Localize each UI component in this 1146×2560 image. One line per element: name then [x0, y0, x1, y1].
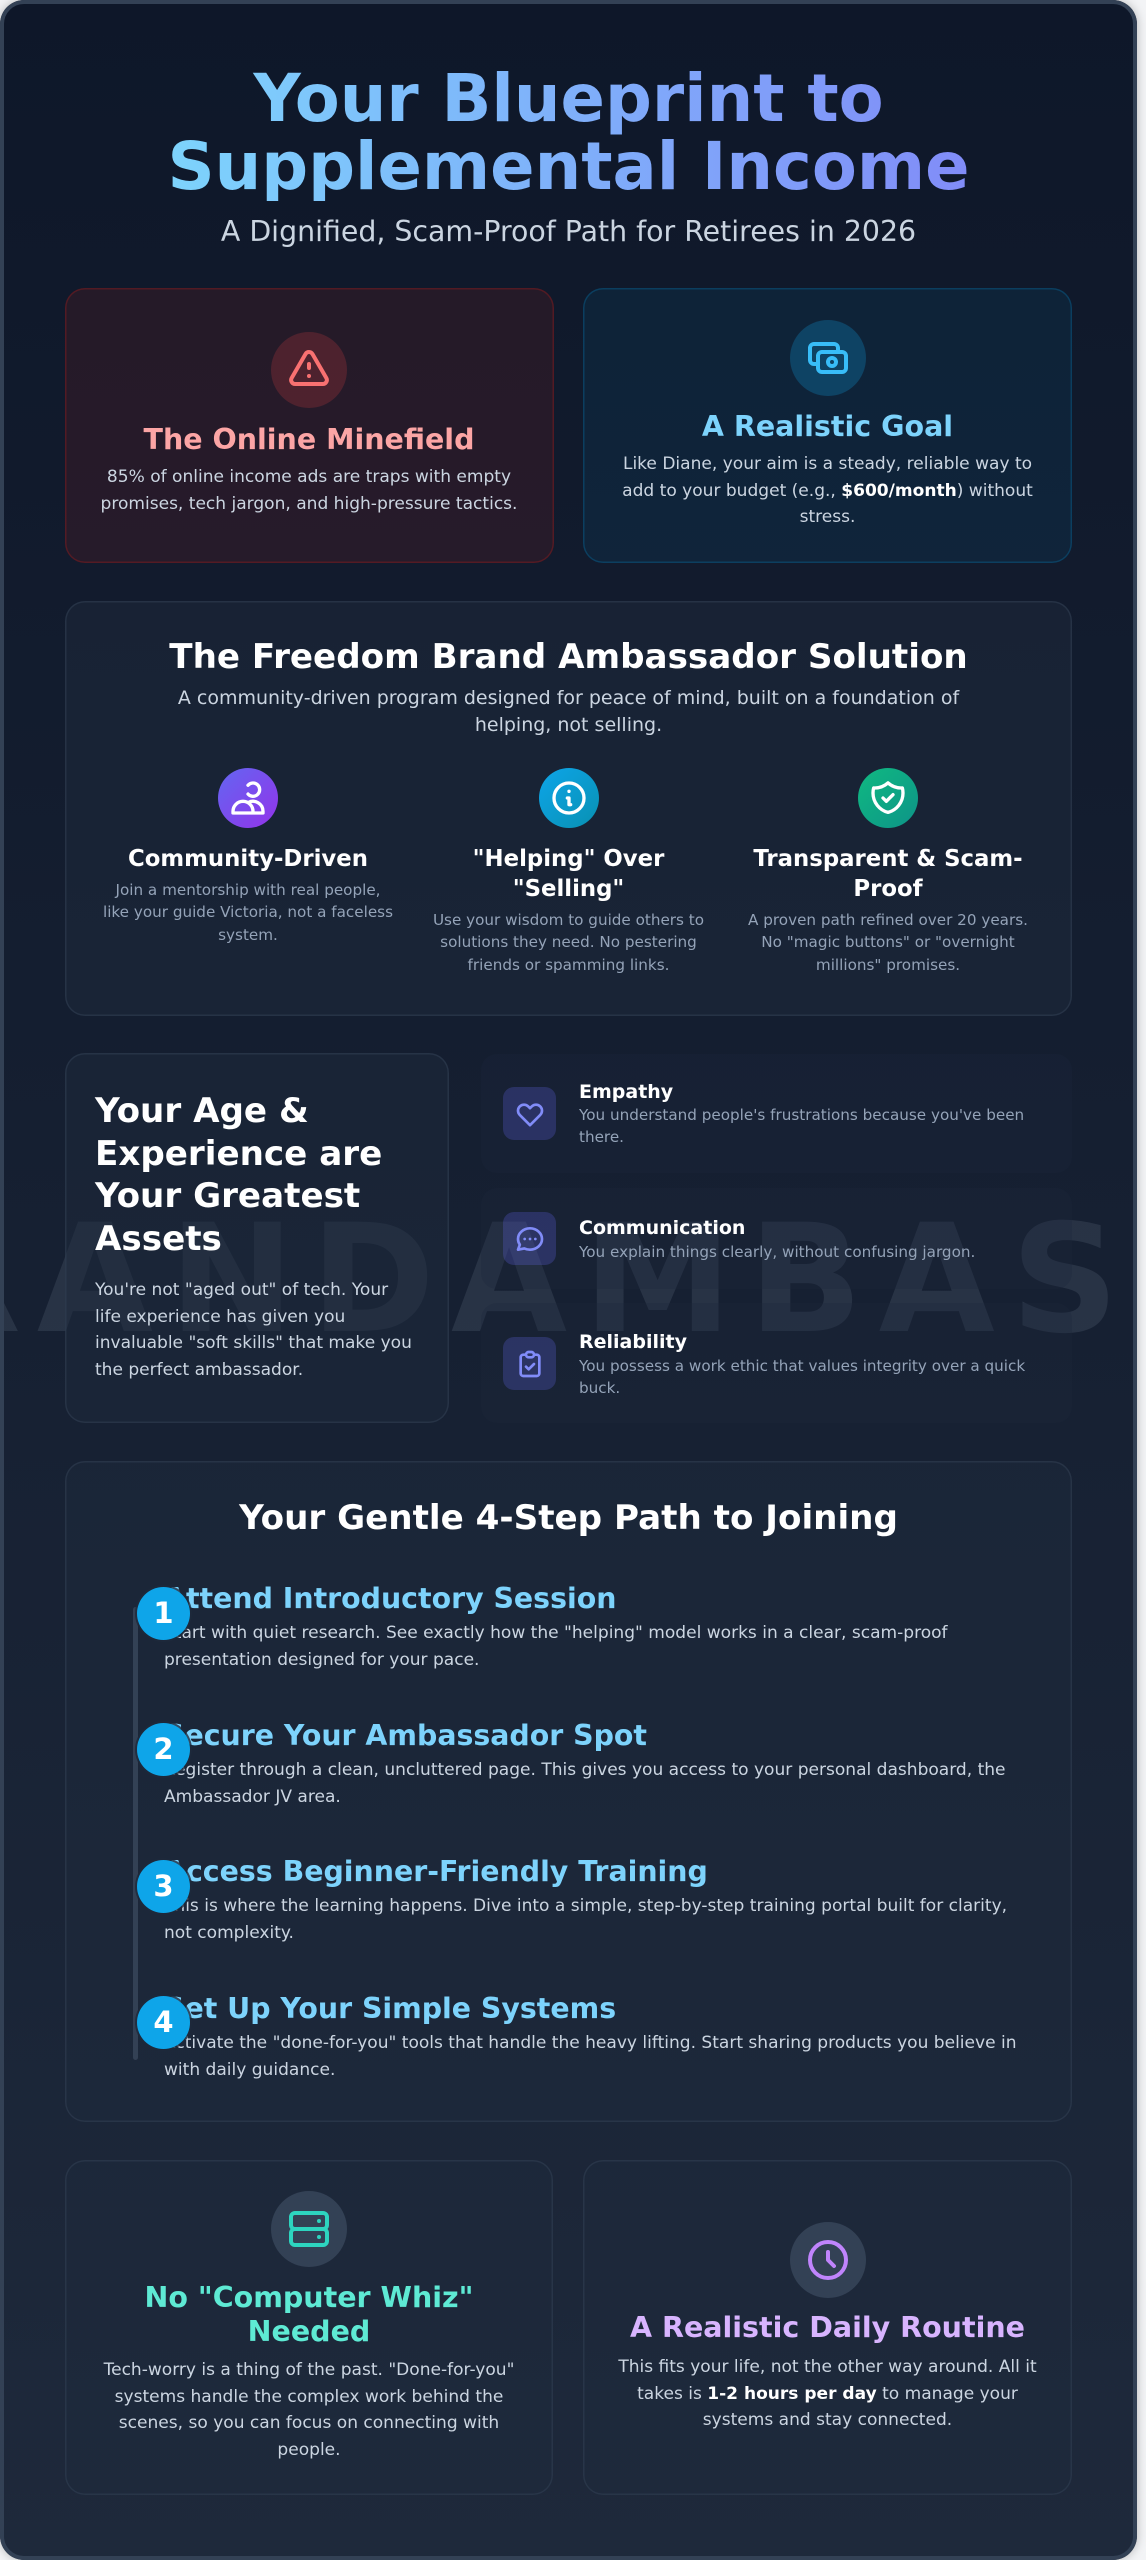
- feature text: [103, 880, 393, 944]
- panel: 4-step path: [65, 1461, 1072, 2122]
- feature title: Proof: [853, 876, 923, 902]
- title: Your Blueprint to: [253, 61, 884, 137]
- icon: heart: [503, 1087, 556, 1140]
- step number: 3: [153, 1869, 174, 1903]
- step number: [137, 1860, 190, 1913]
- feature title: [473, 846, 664, 902]
- text block: [622, 454, 1033, 527]
- heading: Your Age &: [95, 1091, 309, 1131]
- heading: Experience are: [95, 1134, 382, 1174]
- card title: Communication: [579, 1216, 745, 1238]
- panel: a realistic goal: [583, 288, 1072, 563]
- feature text: No "magic buttons" or "overnight: [761, 933, 1015, 951]
- step text: This is where the learning happens. Dive into a simple, step-by-step training portal built for clarity,: [164, 1896, 1007, 1916]
- step text: Ambassador JV area.: [164, 1787, 341, 1807]
- text block: 85% of online income ads are traps with empty: [107, 467, 511, 487]
- card text: there.: [579, 1128, 624, 1146]
- text block: You're not "aged out" of tech. Your: [95, 1280, 388, 1300]
- title: Supplemental Income: [167, 129, 970, 205]
- step 3: [135, 1855, 1007, 1943]
- feature text: system.: [218, 926, 278, 944]
- step title: Access Beginner-Friendly Training: [164, 1855, 708, 1888]
- card text: You explain things clearly, without confusing jargon.: [579, 1242, 975, 1260]
- feature text: friends or spamming links.: [468, 956, 669, 974]
- card: communication: [481, 1188, 1072, 1289]
- step number: 1: [153, 1596, 174, 1630]
- icon: chat bubble: [503, 1212, 556, 1265]
- text block: stress.: [800, 507, 855, 527]
- text block: promises, tech jargon, and high-pressure tactics.: [101, 494, 517, 514]
- feature text: [748, 910, 1028, 974]
- heading: [94, 1091, 382, 1259]
- text block: [101, 467, 517, 514]
- timeline line: [133, 1607, 138, 2060]
- step text: [164, 1760, 1006, 1807]
- heading: Needed: [248, 2315, 370, 2348]
- feature title: "Selling": [513, 876, 624, 902]
- step 4: [135, 1992, 1017, 2080]
- feature title: Transparent & Scam-: [753, 846, 1023, 872]
- text block: invaluable "soft skills" that make you: [95, 1333, 412, 1353]
- card title: Reliability: [579, 1330, 687, 1352]
- text block: This fits your life, not the other way around. All it: [618, 2357, 1037, 2377]
- text block: people.: [277, 2440, 341, 2460]
- step title: Attend Introductory Session: [164, 1582, 616, 1615]
- text block: life experience has given you: [95, 1307, 345, 1327]
- text block: Like Diane, your aim is a steady, reliable way to: [623, 454, 1032, 474]
- feature text: [433, 910, 704, 974]
- step text: presentation designed for your pace.: [164, 1650, 479, 1670]
- text block: A community-driven program designed for peace of mind, built on a foundation of: [178, 687, 959, 709]
- panel: a realistic daily routine: [583, 2160, 1072, 2495]
- step text: not complexity.: [164, 1923, 294, 1943]
- feature text: like your guide Victoria, not a faceless: [103, 903, 393, 921]
- feature title: "Helping" Over: [473, 846, 664, 872]
- heading: A Realistic Goal: [702, 410, 953, 443]
- text block: scenes, so you can focus on connecting with: [119, 2413, 499, 2433]
- icon: cash: [790, 320, 866, 396]
- step text: with daily guidance.: [164, 2060, 335, 2080]
- step 2: [135, 1719, 1006, 1807]
- text block: [618, 2357, 1037, 2430]
- feature text: A proven path refined over 20 years.: [748, 910, 1028, 928]
- icon: community: [218, 768, 278, 828]
- heading: The Online Minefield: [144, 423, 474, 456]
- heading: Your Greatest: [95, 1176, 360, 1216]
- step number: [137, 1996, 190, 2049]
- text block: helping, not selling.: [475, 714, 662, 736]
- step 1: [135, 1582, 948, 1670]
- step text: Register through a clean, uncluttered page. This gives you access to your personal dashboard, the: [164, 1760, 1006, 1780]
- feature: transparent and scam-proof: [748, 768, 1028, 974]
- text block: takes is 1-2 hours per day to manage your: [637, 2384, 1018, 2404]
- heading: No "Computer Whiz": [145, 2281, 473, 2314]
- icon: clipboard check: [503, 1337, 556, 1390]
- panel: the online minefield: [65, 288, 554, 563]
- icon: warning triangle: [271, 332, 347, 408]
- step text: [164, 1623, 948, 1670]
- feature text: Use your wisdom to guide others to: [433, 910, 704, 928]
- text block: the perfect ambassador.: [95, 1360, 303, 1380]
- panel: solution: [65, 601, 1072, 1016]
- feature title: [753, 846, 1023, 902]
- text block: [95, 1280, 412, 1380]
- panel: no computer whiz needed: [65, 2160, 553, 2495]
- feature text: Join a mentorship with real people,: [115, 880, 381, 898]
- feature: helping over selling: [433, 768, 704, 974]
- card text: You possess a work ethic that values integrity over a quick: [579, 1356, 1025, 1374]
- heading: The Freedom Brand Ambassador Solution: [169, 637, 968, 677]
- icon: shield: [858, 768, 918, 828]
- feature text: millions" promises.: [816, 956, 960, 974]
- heading: A Realistic Daily Routine: [630, 2311, 1025, 2344]
- card text: buck.: [579, 1379, 620, 1397]
- text block: [104, 2360, 514, 2460]
- step title: Set Up Your Simple Systems: [164, 1992, 616, 2025]
- step number: [137, 1723, 190, 1776]
- heading: [145, 2281, 473, 2348]
- text block: systems handle the complex work behind the: [115, 2387, 503, 2407]
- subtitle: A Dignified, Scam-Proof Path for Retirees in 2026: [221, 215, 916, 248]
- panel: age and experience: [65, 1053, 449, 1423]
- text block: [178, 687, 960, 736]
- text block: Tech-worry is a thing of the past. "Done-for-you": [104, 2360, 514, 2380]
- step text: Start with quiet research. See exactly how the "helping" model works in a clear, scam-proof: [164, 1623, 948, 1643]
- step text: [164, 1896, 1007, 1943]
- heading: Assets: [95, 1219, 222, 1259]
- icon: server: [271, 2191, 347, 2267]
- step number: 4: [153, 2005, 174, 2039]
- text block: systems and stay connected.: [703, 2410, 952, 2430]
- step text: Activate the "done-for-you" tools that handle the heavy lifting. Start sharing products you believe in: [164, 2033, 1017, 2053]
- step text: [164, 2033, 1017, 2080]
- feature text: solutions they need. No pestering: [440, 933, 697, 951]
- icon: info: [538, 768, 598, 828]
- feature: community-driven: [103, 768, 393, 944]
- text block: add to your budget (e.g., $600/month) without: [622, 481, 1033, 501]
- card: empathy: [481, 1054, 1072, 1173]
- title: [167, 61, 970, 205]
- card text: [579, 1106, 1024, 1146]
- step number: 2: [153, 1732, 174, 1766]
- heading: Your Gentle 4-Step Path to Joining: [239, 1498, 898, 1538]
- card title: Empathy: [579, 1080, 673, 1102]
- card text: You understand people's frustrations because you've been: [579, 1106, 1024, 1124]
- card: reliability: [481, 1303, 1072, 1423]
- feature title: Community-Driven: [128, 846, 368, 872]
- step number: [137, 1587, 190, 1640]
- icon: clock: [790, 2222, 866, 2298]
- step title: Secure Your Ambassador Spot: [164, 1719, 647, 1752]
- card text: [579, 1356, 1025, 1397]
